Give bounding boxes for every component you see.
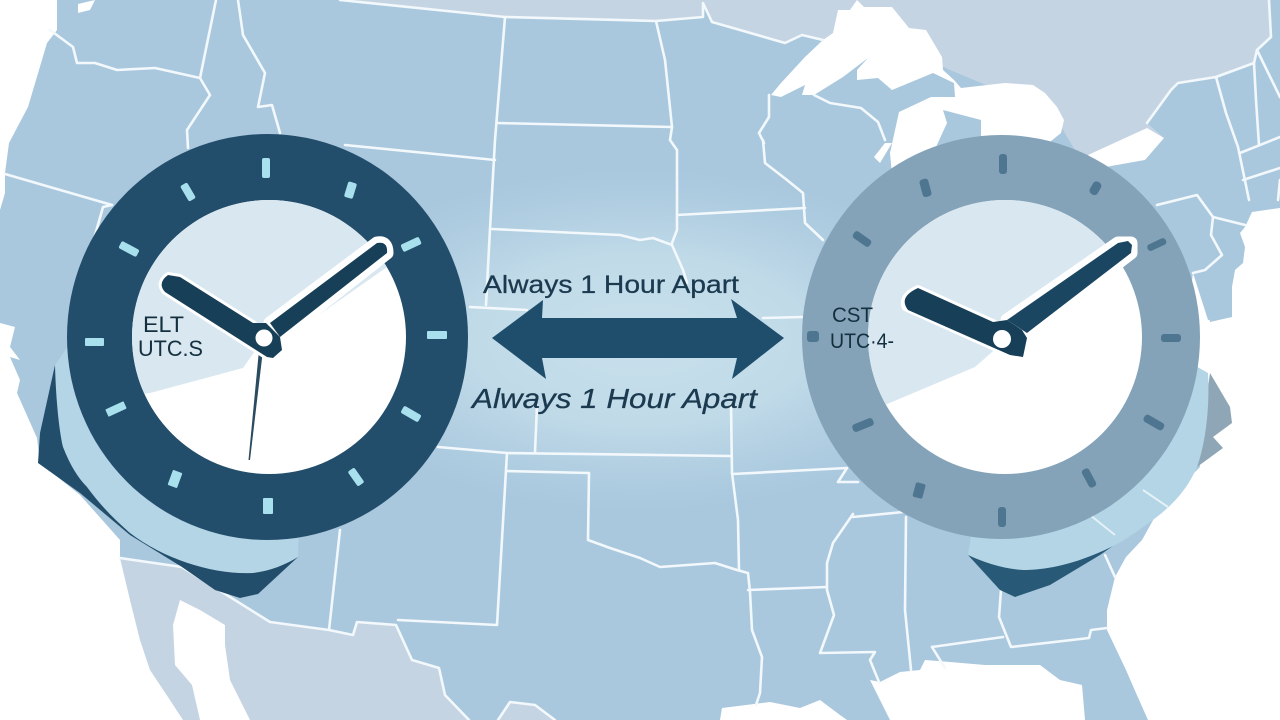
clock shadow: dark crescent bbox=[38, 365, 298, 598]
water: Great Lakes bbox=[771, 0, 1064, 175]
clock hour ticks bbox=[85, 158, 447, 514]
clock face bbox=[132, 200, 406, 474]
water: Pacific Ocean north bbox=[0, 0, 57, 210]
caption: bottom italic: Always 1 Hour Apart bbox=[470, 383, 758, 414]
map region: Mexico bbox=[120, 558, 469, 720]
water: Gulf of Mexico west bbox=[720, 700, 847, 720]
clock shadow: light crescent bbox=[55, 300, 300, 573]
clock label: CST UTC 4-: UTC·4- bbox=[830, 330, 894, 353]
clock label: ELT UTC.S bbox=[138, 312, 203, 361]
clock: ELT (left) bbox=[38, 100, 468, 598]
clock hour ticks bbox=[807, 154, 1181, 527]
water: Lake Ontario bbox=[1088, 128, 1164, 168]
water: Pacific Ocean south bbox=[0, 323, 183, 720]
clock hour hand bbox=[904, 288, 1027, 357]
clock shadow border line bbox=[1090, 490, 1168, 535]
clock second hand bbox=[248, 350, 263, 460]
caption: top: Always 1 Hour Apart bbox=[483, 271, 739, 299]
clock label: CST UTC 4-: CST bbox=[832, 304, 873, 327]
map region: Gulf inlet shading bbox=[498, 702, 555, 720]
clock face shaded wedge bbox=[868, 200, 1105, 404]
water: Gulf of California bbox=[173, 600, 250, 720]
clock minute hand bbox=[270, 243, 387, 337]
water: Puget Sound bbox=[78, 0, 95, 13]
clock bezel bbox=[802, 135, 1200, 539]
clock face shaded wedge bbox=[132, 200, 387, 394]
clock shadow: light crescent bbox=[968, 340, 1208, 570]
clock label: ELT UTC.S: ELT bbox=[143, 312, 184, 337]
map region: Delmarva peninsula bbox=[1202, 273, 1232, 322]
clock label: ELT UTC.S: UTC.S bbox=[138, 336, 203, 361]
map region: Outer Banks shading bbox=[1197, 373, 1232, 467]
map region: Canada bbox=[340, 0, 1271, 155]
clock label: CST UTC 4- bbox=[830, 304, 894, 353]
clock: CST (right) bbox=[802, 100, 1208, 597]
water: Atlantic Ocean bbox=[1107, 208, 1280, 720]
double-headed arrow bbox=[492, 299, 784, 379]
clock shadow: dark crescent bbox=[968, 500, 1150, 597]
clock hour hand bbox=[162, 275, 282, 358]
clock minute hand bbox=[1007, 241, 1132, 333]
clock hub bbox=[256, 330, 272, 346]
clock face bbox=[868, 200, 1142, 474]
clock hub bbox=[993, 330, 1011, 348]
clock bezel bbox=[67, 134, 468, 540]
water: Gulf of Mexico east bbox=[870, 660, 1085, 720]
